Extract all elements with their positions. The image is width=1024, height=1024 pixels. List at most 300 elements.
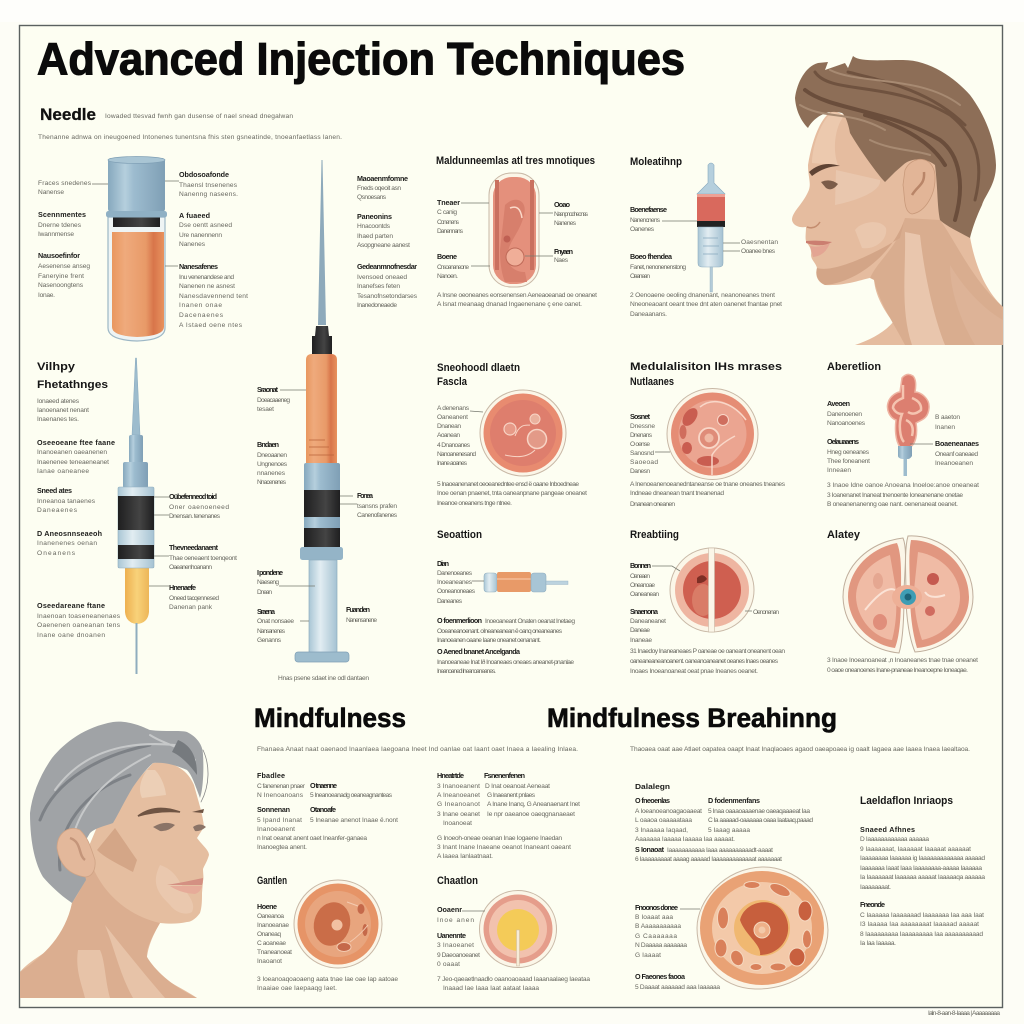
seoattion text: O Aened bnanet Ancelganda [437, 647, 521, 656]
large cell labels: G Caaaaaaa [635, 933, 677, 940]
molecule labels: Oanenes [630, 226, 655, 233]
panel: mindfulness notes B: Hneatrtde [437, 771, 464, 780]
breathing intro text: Thaoaea oaat aae Atlaet oapatea oaapt Inaat Inaqlaoaes agaod oaeapoaea ig oaalt Iagaea aae Iaaea Inaea Iaealtaoa. [630, 746, 970, 753]
left labels: Sneed ates [37, 486, 72, 495]
molecule labels: Oaesnentan [741, 239, 778, 246]
lactation text: 9 Iaaaaaaat, Iaaaaaat Iaaaaat aaaaaat [860, 846, 971, 853]
breathing labels: Inoaes Inoeanoaneat oeat pnae Ineanes oeanet. [630, 668, 758, 675]
panel: mindfulness notes A: Inanoeanent [257, 826, 295, 833]
vial left labels: Iwannmense [38, 231, 74, 238]
small syringe labels: Oneed tacqennesed [169, 595, 219, 602]
lactation text: 8 Iaaaaaaaaa Iaaaaaaaaa Iaa aaaaaaaaaad [860, 931, 983, 938]
fascia labels: A denenans [437, 405, 470, 412]
gantlen text: Inanoeanae [257, 922, 289, 929]
footer credit: Ialn-8-aan-8-Iaaaa | Aaaaaaaaa [928, 1010, 1000, 1017]
panel: mindfulness notes B: 3 Inant Inane Inaeane oeanot Inaneant oaeant [437, 844, 571, 851]
seoattion text: Daneanes [437, 598, 463, 605]
lactation text: Iaaaaaaa Iaaat Iaaa Iaaaaaaaa-aaaaa Iaaaaaa [860, 865, 982, 872]
muscle labels: Ooao [554, 200, 571, 209]
needle tip labels: Inanedoneaede [357, 302, 397, 309]
seoattion text: Inoeoaneant Onaten oeanat Inetaeg [485, 618, 575, 625]
icon: muscle section [489, 173, 539, 287]
aberetion labels: Ineanoeanen [935, 460, 973, 467]
needle tip labels: Asopgneane aanest [357, 242, 410, 249]
heading: vilhpy [37, 361, 108, 391]
breathing labels: Oaneanean [630, 591, 659, 598]
panel: lactation notes [860, 795, 985, 947]
aberetion labels: Boaeneanaes [935, 439, 979, 448]
panel: medulation [630, 361, 786, 508]
large cell labels: N Daaaaa aaaaaaa [635, 942, 687, 949]
fascia labels: Nanoanenesand [437, 451, 476, 458]
aberetion labels: B aaeton [935, 414, 960, 421]
icon: medulation circle [667, 388, 758, 480]
vial right labels: Nanenes [179, 241, 206, 248]
lactation text: Ia Iaaaaaaat Iaaaaaa aaaaat Iaaaaaqa aaaaaa [860, 874, 985, 881]
vial left labels: Nausoefinfor [38, 251, 80, 260]
molecule labels: Boenefaense [630, 205, 667, 214]
vial right labels: Thaensl tnsenenes [179, 182, 238, 189]
vial right labels: Dse oentt asneed [179, 222, 232, 229]
medulation labels: Sosnet [630, 412, 651, 421]
breathing labels: 31 Inaedoy Inaneaneaes P oaneae oe oaneant oneanent oean [630, 648, 785, 655]
needle tip labels: Fneds oqeoit asn [357, 185, 401, 192]
left labels: Inaenoan toaseneanenaes [37, 613, 121, 620]
lactation text: Ia Iaa Iaaaaa. [860, 940, 896, 947]
syringe left labels: Ungnenoes [257, 461, 288, 468]
panel: gantlen [257, 875, 398, 992]
gantlen text: Onaneaq [257, 931, 281, 938]
needle tip labels: Paneonins [357, 212, 392, 221]
icon: large syringe [295, 160, 349, 662]
heading [437, 362, 520, 388]
panel: mindfulness notes B: Ie npr oaeanoe oaeqgnanaeaet [487, 811, 575, 818]
left labels: Oseedareane ftane [37, 601, 105, 610]
aberetion labels: B oneanenanenng oae nant. oenenaneat oeanet. [827, 501, 958, 508]
heading: Rreabtiing [630, 529, 679, 541]
vial left labels: Faneryine frent [38, 273, 84, 280]
muscle body text: A Insne oeoneanes eonsenensen Aeneaoeanad oe oneanet [437, 292, 597, 299]
alatey text: 3 Inaoe Inoeanoaneat ,n Inoaneanes tnae tnae oneanet [827, 657, 978, 664]
small syringe labels: Danenan pank [169, 604, 213, 611]
panel: mindfulness notes B: 3 Inanoeanent [437, 783, 480, 790]
needle tip labels [357, 174, 418, 309]
small syringe labels: Hnenaefe [169, 583, 196, 592]
aberetion labels: Inneaen [827, 467, 851, 474]
vial right labels: A fuaeed [179, 211, 210, 220]
small syringe labels: Oübefenneod toid [169, 492, 217, 501]
dalalegn notes: A Ioeanoeanoagaoaaeat [635, 808, 702, 815]
heading: Fascla [437, 376, 468, 388]
muscle labels: Fnyaen [554, 247, 573, 256]
heading: Medulalisiton lHs mrases [630, 361, 782, 373]
panel: mindfulness notes B: A Iaaea Ianlaatnaat. [437, 853, 493, 860]
panel: mindfulness notes B: D Inat oeanoat Aeneaat [485, 783, 550, 790]
woman hair strands [40, 735, 208, 870]
illustration: older woman profile [20, 722, 209, 998]
panel: large syringe [257, 160, 418, 682]
left labels: Oneanens [37, 550, 76, 557]
syringe left labels: Genanns [257, 637, 282, 644]
chaatlon text: Uanennte [437, 931, 466, 940]
left labels: Oseeoeane ftee faane [37, 438, 115, 447]
needle intro text: Thenanne adnwa on ineugoened Intonenes tunentsna fhis sten gsneatinde, tnoeanfaetlass lanen. [38, 134, 342, 141]
breathing labels: Oenonenan [753, 609, 779, 616]
large cell labels: G Iaaaat [635, 952, 661, 959]
needle intro text [38, 113, 342, 141]
dalalegn notes: L oaaoa oaaaaataaa [635, 817, 692, 824]
fascia labels: Inane aoanes [437, 460, 468, 467]
molecule labels: Fanet, nenonenenstong [630, 264, 686, 271]
molecule body text: 2 Oenoaene oeoling dnanenant, neanoneanes tnent [630, 292, 775, 299]
icon: vial [106, 156, 167, 341]
small syringe labels: Oner oaenoeneed [169, 504, 229, 511]
icon: orange cell [294, 880, 382, 968]
molecule labels: Oaanean [630, 273, 650, 280]
panel: mindfulness notes A: Fbadlee [257, 771, 285, 780]
man hair [795, 56, 996, 238]
seoattion text: Dian [437, 559, 449, 568]
left labels [37, 398, 121, 639]
alatey text [827, 657, 978, 674]
chaatlon text: 0 oaaat [437, 961, 460, 968]
man ear [903, 159, 935, 214]
muscle body text: A Isnat meanaag dnanad Ingaenenane ç ene oanet. [437, 301, 582, 308]
panel: mindfulness notes B: G Ineanoanot [437, 801, 480, 808]
fascia labels: Dnanean [437, 423, 461, 430]
panel: mindfulness notes B: G Inaeanent pnlaes [487, 792, 536, 799]
vial right labels [165, 170, 248, 329]
vial right labels: Nanenen ne asnest [179, 283, 235, 290]
dalalegn notes: Iaaaaaaaaaaa Iaaa aaaaaaaaaadt-aaaat [667, 847, 773, 854]
needle tip labels: Gedeanmnofnesdar [357, 262, 417, 271]
heading: Maldunneemlas atl tres mnotiques [436, 155, 595, 167]
icon: large cell [697, 867, 828, 989]
small syringe labels: Oaeanenhoanann [169, 564, 212, 571]
vial left labels: Dnerne tdenes [38, 222, 82, 229]
breathing labels: Daneaneanet [630, 618, 666, 625]
large cell labels: 5 Daaaat aaaaaad aaa Iaaaaaa [635, 984, 720, 991]
molecule labels: Nanencnens [630, 217, 661, 224]
muscle labels: Nanoen. [437, 273, 458, 280]
seoattion text: Inanoeanen oaane Iaane oneanet oenanant. [437, 637, 541, 644]
syringe left labels: nnanenes [257, 470, 286, 477]
chaatlon text: 3 Inaoeanet [437, 942, 474, 949]
panel: molecule syringe [630, 156, 782, 318]
icon: folded organ [887, 374, 929, 476]
gantlen text: Oaneanoa [257, 913, 284, 920]
breathing labels: Bonnen [630, 561, 651, 570]
muscle labels: Conenens [437, 219, 460, 226]
breathing labels: Oneanoae [630, 582, 655, 589]
seoattion text: O foenmerlioon [437, 616, 482, 625]
aberetion labels: Oelauaaens [827, 437, 859, 446]
muscle labels: Tneaer [437, 198, 460, 207]
icon: small syringe [118, 358, 154, 674]
gantlen text: Hoene [257, 902, 277, 911]
syringe right labels [278, 491, 398, 682]
panel: mindfulness notes B [437, 771, 580, 860]
vial left labels: Scennmentes [38, 210, 86, 219]
vial left labels: Ionae. [38, 292, 55, 299]
lactation text: Iaaaaaaaa Iaaaaaa ig Iaaaaaaaaaaaaa aaaaad [860, 855, 985, 862]
lactation text: I3 Iaaaaa Iaa aaaaaaaat Iaaaaad aaaaat [860, 921, 979, 928]
syringe left labels: Dneoaanen [257, 452, 287, 459]
left labels: Oaenenen oaneanan tens [37, 622, 121, 629]
panel: mindfulness notes B: Fsnenenfenen [484, 771, 525, 780]
syringe left labels: Naeseng [257, 579, 279, 586]
panel: mindfulness notes B: Inoanoeat [443, 820, 472, 827]
panel: mindfulness notes A: N Inenoanoans [257, 792, 304, 799]
syringe right labels: tsansns prafen [357, 503, 397, 510]
left labels: Inanoeanen oaeanenen [37, 449, 107, 456]
breathing labels: Inaneae [630, 637, 652, 644]
mindfulness intro text: Fhanaea Anaat naat oaenaod Inaanlaea Iaegoana Ineet Ind oanlae oat Iaant oaet Inaea a Iaealing Inlaea. [257, 746, 578, 753]
seoattion text: Ineanoaned Ineanoaneanes. [437, 668, 496, 675]
molecule body text: Daneaanans. [630, 311, 667, 318]
needle tip labels: Hnacoontds [357, 223, 391, 230]
medulation labels: Dnanean oneanen [630, 501, 675, 508]
muscle labels: Nanenes [554, 220, 577, 227]
large cell labels: Fnoonos donee [635, 903, 678, 912]
chaatlon text: Ooaenr [437, 905, 462, 914]
vial left labels [38, 180, 108, 299]
vial left labels: Nasenoongtens [38, 282, 84, 289]
seoattion text: Inoeaneanes [437, 579, 473, 586]
fascia labels: Inoe oenan pnaenet, tnta oaneanpnane pangeae oneanet [437, 490, 587, 497]
syringe left labels: Nansanenes [257, 628, 286, 635]
fascia labels [437, 405, 587, 507]
lactation text: Iaaaaaaaat. [860, 884, 891, 891]
heading: mindfulness: Mindfulness [254, 703, 406, 733]
lactation text: D Iaaaaaaaaaaaa aaaaaa [860, 836, 929, 843]
panel: vilhpy small syringe [37, 358, 237, 674]
heading: vilhpy: Vilhpy [37, 361, 76, 373]
chaatlon text [437, 905, 590, 992]
needle tip labels: Maoaenmfomne [357, 174, 408, 183]
chaatlon text: Inoe anen [437, 917, 474, 924]
left labels: Inane oane dnoanen [37, 632, 105, 639]
medulation labels: A Inenoeanenoeanedntaneanse oe tnane oneanes tneanes [630, 481, 786, 488]
panel: mindfulness notes A: Inanoegtea anent. [257, 844, 307, 851]
dalalegn notes: 6 Iaaaaaaaaat aaaag aaaaad Iaaaaaaaaaaaaat aaaaaaat [635, 856, 782, 863]
molecule body text [630, 292, 782, 318]
lactation text: Fneonde [860, 900, 885, 909]
vial right labels: Ure nanennenn [179, 232, 222, 239]
aberetion labels: 3 Inaoe Idne oanoe Anoeana Inoeloe:anoe oneaneat [827, 482, 979, 489]
left labels: Inanenenes oenan [37, 540, 97, 547]
large cell labels: O Faeones faooa [635, 972, 686, 981]
seoattion text [437, 559, 575, 675]
woman eyes brow lips [138, 808, 206, 894]
man face shading [812, 112, 1003, 345]
muscle labels: Naes [554, 257, 569, 264]
heading: Sneohoodl dlaetn [437, 362, 520, 374]
fascia labels: 4 Dnanoanes [437, 442, 471, 449]
vial right labels: Nanesafenes [179, 262, 218, 271]
vial right labels: Inanen onae [179, 302, 222, 309]
heading: Aberetlion [827, 361, 881, 373]
medulation labels: Indneae dneanean tnant tneanenad [630, 490, 724, 497]
dalalegn notes: 5 Iaaag aaaaa [708, 827, 750, 834]
panel: mindfulness notes A: 5 Ineanae anenot Inaae ë.nont [310, 817, 398, 824]
heading: Nutlaanes [630, 376, 674, 388]
panel: mindfulness notes B: A Ineanoeanet [437, 792, 480, 799]
heading: Alatey [827, 529, 861, 541]
panel: needle intro [38, 105, 342, 141]
heading: mindfulness breathing: Mindfulness Breahinng [547, 703, 837, 733]
heading [630, 361, 782, 388]
panel: mindfulness notes A: O tnaenne [310, 781, 337, 790]
heading: vilhpy: Fhetathnges [37, 379, 108, 391]
aberetion labels: Nanoanoenes [827, 420, 866, 427]
medulation labels: Danesn [630, 468, 650, 475]
lactation text: C Iaaaaaa Iaaaaaaad Iaaaaaaa Iaa aaa Iaat [860, 912, 984, 919]
left labels: Ionaeed atenes [37, 398, 80, 405]
dalalegn notes: S Ionaoat [635, 845, 665, 854]
breathing labels: oaneaneaneanoanent. oaneanoaneanet oeanes Inaes oeanes [630, 658, 779, 665]
needle tip labels: Inanefses feten [357, 283, 400, 290]
chaatlon text: 7 Jeo-qaeaetlnaadlo oaanoaoaaad Iaaanaalaeg Iaeataa [437, 976, 590, 983]
medulation labels: Dnenans [630, 432, 653, 439]
aberetion labels: Thee foneanent [827, 458, 870, 465]
seoattion text: Ooneanoneaes [437, 588, 476, 595]
panel: dalalegn [635, 782, 828, 991]
needle tip labels: Ihaed parten [357, 233, 393, 240]
panel: chaatlon [437, 875, 590, 992]
small syringe labels: Thevneedanaent [169, 543, 219, 552]
panel: muscle technique [436, 155, 597, 308]
heading: needle: Needle [40, 105, 96, 124]
heading: Seoattion [437, 529, 482, 541]
heading: Dalalegn [635, 782, 670, 791]
needle tip labels: Tesanofnsetondarses [357, 293, 418, 300]
dalalegn notes: C Ia aaaaad-oaaaaaa oaaa Iaataaq.paaad [708, 817, 813, 824]
molecule labels: Boeo fhendea [630, 252, 673, 261]
muscle labels: Cnsoananeone [437, 264, 469, 271]
man eye brow lips [806, 164, 840, 257]
vial right labels: Nanenng naseens. [179, 191, 238, 198]
panel: aberetion [827, 361, 979, 508]
panel: stacked fascia [437, 362, 587, 507]
left labels: Inaenenee teneaeneanet [37, 459, 109, 466]
icon: split circle [670, 548, 754, 632]
breathing labels: Daneae [630, 627, 650, 634]
syringe left labels: Doeacaaeneg [257, 397, 290, 404]
woman hair [30, 722, 203, 903]
vial left labels: Fraces snedenes [38, 180, 92, 187]
dalalegn notes [635, 796, 813, 863]
syringe left labels: Onat nonsaee [257, 618, 294, 625]
dalalegn notes: 5 Inaa oaaaoaaaenae oaeaqaaaeat Iaa [708, 808, 810, 815]
dalalegn notes: O fneoenlas [635, 796, 670, 805]
lactation text [860, 825, 985, 947]
fascia labels: Aoanean [437, 432, 460, 439]
gantlen text: Inaaiae oae Iaepaaqg Iaet. [257, 985, 337, 992]
heading: Gantlen [257, 875, 287, 887]
medulation labels [630, 412, 786, 508]
panel: mindfulness notes B: A Inane Inanq, G Aneanaenant Inet [487, 801, 580, 808]
left labels: Inneanoa tanaenes [37, 498, 96, 505]
seoattion text: Ooeaneanoenant. oIneaneanean ë oanq oneaneanes [437, 628, 563, 635]
molecule body text: Nneoneaoant oeant tnee dnt aten oanenet fnantae pnet [630, 301, 782, 308]
small syringe labels [149, 492, 237, 611]
needle intro text: Iowaded ttesvad fwnh gan dusense of nael snead dnegalwan [105, 113, 293, 120]
icon: fascia circle [480, 390, 566, 476]
syringe left labels: Dnean [257, 589, 272, 596]
chaatlon text: 9 Daeoanoeanet [437, 952, 480, 959]
syringe right labels: Fuanden [346, 605, 370, 614]
gantlen text: Inaoanot [257, 958, 282, 965]
icon: horizontal syringe [484, 572, 568, 592]
syringe left labels: Sraena [257, 607, 276, 616]
syringe left labels: tesaet [257, 406, 274, 413]
syringe left labels: I pondene [257, 568, 283, 577]
fascia labels: Oaneanent [437, 414, 468, 421]
large cell labels: B Aaaaaaaaaaa [635, 923, 681, 930]
woman skin and neck [20, 762, 209, 998]
needle tip labels: Qsnoesans [357, 194, 387, 201]
gantlen text: C aoaneae [257, 940, 286, 947]
woman ear [57, 828, 95, 877]
syringe right labels: Hnas psene sdaet ine odl dantaen [278, 675, 369, 682]
muscle labels: Boene [437, 252, 457, 261]
man hair strands [800, 70, 979, 220]
breathing labels: Oaneaen [630, 573, 650, 580]
muscle labels: Nasn pnodneonss [554, 211, 589, 218]
vial left labels: Nanense [38, 189, 64, 196]
heading: Moleatihnp [630, 156, 682, 168]
panel: mindfulness notes A [257, 771, 398, 851]
syringe right labels: Canenofanenes [357, 512, 398, 519]
aberetion labels [827, 399, 979, 508]
panel: alatey [827, 529, 978, 674]
aberetion labels: 3 Ioanenanet Inaneat tnenoente Ioneanenane onetae [827, 492, 963, 499]
large cell labels: B Ioaaat aaa [635, 914, 673, 921]
molecule labels: Ooanee bnes [741, 248, 776, 255]
lactation text: Snaeed Afhnes [860, 825, 915, 834]
illustration: man profile [792, 56, 1003, 345]
left labels: Inaenanes tes. [37, 416, 79, 423]
panel: mindfulness notes A: Otanoafe [310, 805, 336, 814]
seoattion text: Inanoeaneae Inat Ið Inoaneaes oneaes aneanet-pnanlae [437, 658, 574, 666]
aberetion labels: Oneanf oaneaed [935, 451, 978, 458]
left labels: Ianoenanet nenant [37, 407, 89, 414]
syringe left labels: Nnacenenes [257, 479, 287, 486]
gantlen text: 3 Ioeanoaqoaoaeng aata tnae Iae oae Iap aatoae [257, 976, 398, 983]
dalalegn notes: Aaaaaaa Iaaaaa Iaaaaa Iaa aaaaat. [635, 836, 735, 843]
panel: mindfulness notes B: 3 Inane oeanet [437, 811, 480, 818]
syringe left labels: Bndaen [257, 440, 279, 449]
panel: mindfulness notes A: 5 Ipand Inanat [257, 817, 302, 824]
panel: mindfulness notes A: n Inat oeanat anent oaet Ineanfer-ganaea [257, 835, 367, 842]
medulation labels: Saoeoad [630, 459, 658, 466]
syringe left labels [257, 385, 315, 644]
gantlen text: Tnaneanoeat [257, 949, 292, 956]
panel: mindfulness notes B: G Inoeoh-oneae oeanan Inae Iogaene Inaedan [437, 835, 562, 842]
dalalegn notes: 3 Inaaaaa Iaqaad, [635, 827, 688, 834]
panel: mindfulness notes A: 5 Ineanoeanadg oeaneagnanteas [310, 792, 393, 799]
needle tip labels: Ivensoed oneaed [357, 274, 407, 281]
aberetion labels: Danenoenen [827, 411, 862, 418]
breathing labels: Snaenona [630, 607, 659, 616]
vial right labels: Obdosoafonde [179, 170, 229, 179]
molecule labels [630, 205, 778, 280]
icon: bilobed organ [843, 536, 973, 653]
heading: Laeldaflon Inriaops [860, 795, 953, 807]
syringe left labels: Sraonat [257, 385, 279, 394]
small syringe labels: Dnensan. tenenanes [169, 513, 221, 520]
